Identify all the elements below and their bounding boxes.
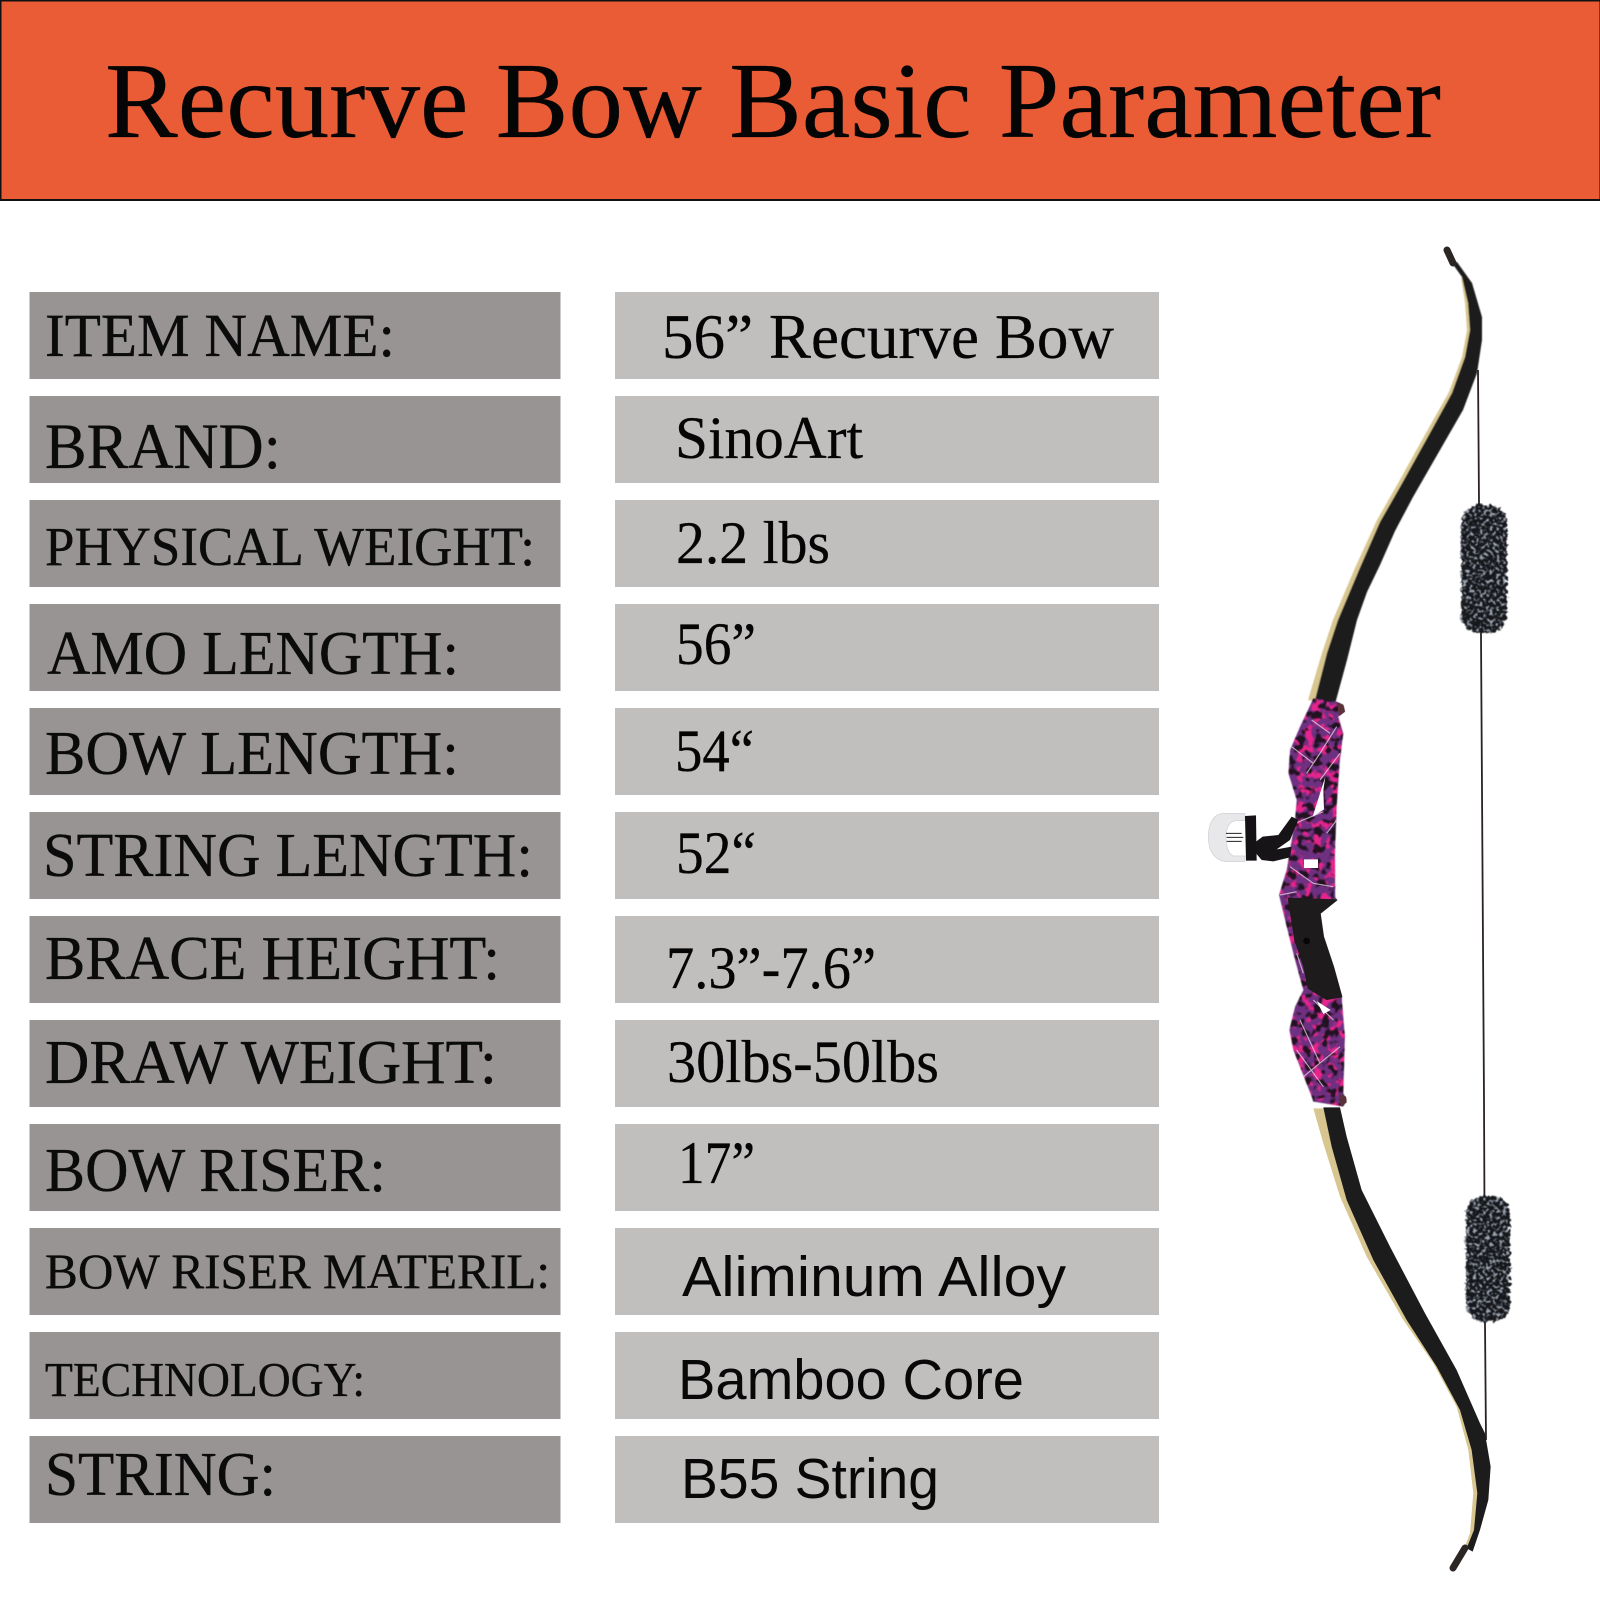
value: physical weight: 2.2 lbs — [676, 510, 830, 576]
value: technology: Bamboo Core — [678, 1348, 1024, 1412]
recurve bow illustration — [1208, 250, 1510, 1568]
rest bracket — [1245, 815, 1257, 861]
label: brace height — [30, 916, 560, 1003]
value: item name — [615, 292, 1159, 379]
value: draw weight: 30lbs-50lbs — [667, 1029, 939, 1095]
label: string length: STRING LENGTH: — [43, 822, 533, 890]
label: physical weight — [30, 500, 560, 587]
label: brace height: BRACE HEIGHT: — [45, 925, 500, 993]
riser — [1208, 698, 1347, 1107]
value: string length — [615, 812, 1159, 899]
upper limb — [1308, 262, 1482, 704]
value: amo length — [615, 604, 1159, 691]
label: brand: BRAND: — [45, 411, 281, 483]
value: string length: 52“ — [676, 820, 756, 886]
value: bow riser: 17” — [678, 1130, 755, 1196]
upper limb tip — [1447, 250, 1453, 263]
value: brace height — [615, 916, 1159, 1003]
title banner — [0, 0, 1600, 200]
label: technology — [30, 1332, 560, 1419]
label: bow length: BOW LENGTH: — [45, 720, 459, 788]
arrow rest — [1208, 813, 1298, 862]
upper limb silencer — [1461, 505, 1507, 633]
lower limb — [1313, 1107, 1491, 1552]
title: Recurve Bow Basic Parameter — [105, 42, 1441, 161]
bow string — [1478, 370, 1486, 1440]
label: string: STRING: — [45, 1441, 276, 1509]
label: draw weight — [30, 1020, 560, 1107]
label: bow riser material: BOW RISER MATERIL: — [45, 1243, 550, 1299]
value: physical weight — [615, 500, 1159, 587]
value: bow length: 54“ — [675, 718, 754, 784]
label: item name — [30, 292, 560, 379]
value: brand — [615, 396, 1159, 483]
label: brand — [30, 396, 560, 483]
lower limb tip — [1453, 1548, 1465, 1568]
label: bow riser — [30, 1124, 560, 1211]
value: string — [615, 1436, 1159, 1523]
label: bow riser: BOW RISER: — [45, 1137, 386, 1205]
value: technology — [615, 1332, 1159, 1419]
riser windows — [1304, 777, 1331, 1014]
bristles — [1226, 833, 1243, 841]
camouflage riser body — [1279, 698, 1347, 1107]
parameter values column — [615, 292, 1159, 1523]
value: brace height: 7.3”-7.6” — [666, 935, 876, 1001]
black grip — [1288, 898, 1342, 999]
label: draw weight: DRAW WEIGHT: — [45, 1029, 497, 1097]
label: amo length — [30, 604, 560, 691]
value: bow length — [615, 708, 1159, 795]
label: amo length: AMO LENGTH: — [47, 620, 459, 688]
value: bow riser — [615, 1124, 1159, 1211]
limb bolts — [1337, 702, 1347, 1106]
label: item name: ITEM NAME: — [45, 303, 395, 370]
value: amo length: 56” — [676, 611, 756, 677]
value: draw weight — [615, 1020, 1159, 1107]
label: physical weight: PHYSICAL WEIGHT: — [45, 516, 535, 577]
label: technology: TECHNOLOGY: — [45, 1352, 365, 1407]
value: brand: SinoArt — [675, 405, 863, 471]
label: bow length — [30, 708, 560, 795]
lower limb silencer — [1466, 1196, 1510, 1322]
parameter labels column — [30, 292, 560, 1523]
value: item name: 56” Recurve Bow — [662, 301, 1114, 372]
value: string: B55 String — [681, 1447, 939, 1511]
value: riser material — [615, 1228, 1159, 1315]
value: riser material: Aliminum Alloy — [682, 1245, 1067, 1309]
clear rest ring — [1208, 813, 1245, 862]
camouflage branches — [1280, 720, 1340, 1087]
label: bow riser material — [30, 1228, 560, 1315]
label: string — [30, 1436, 560, 1523]
grip screw — [1303, 938, 1310, 944]
